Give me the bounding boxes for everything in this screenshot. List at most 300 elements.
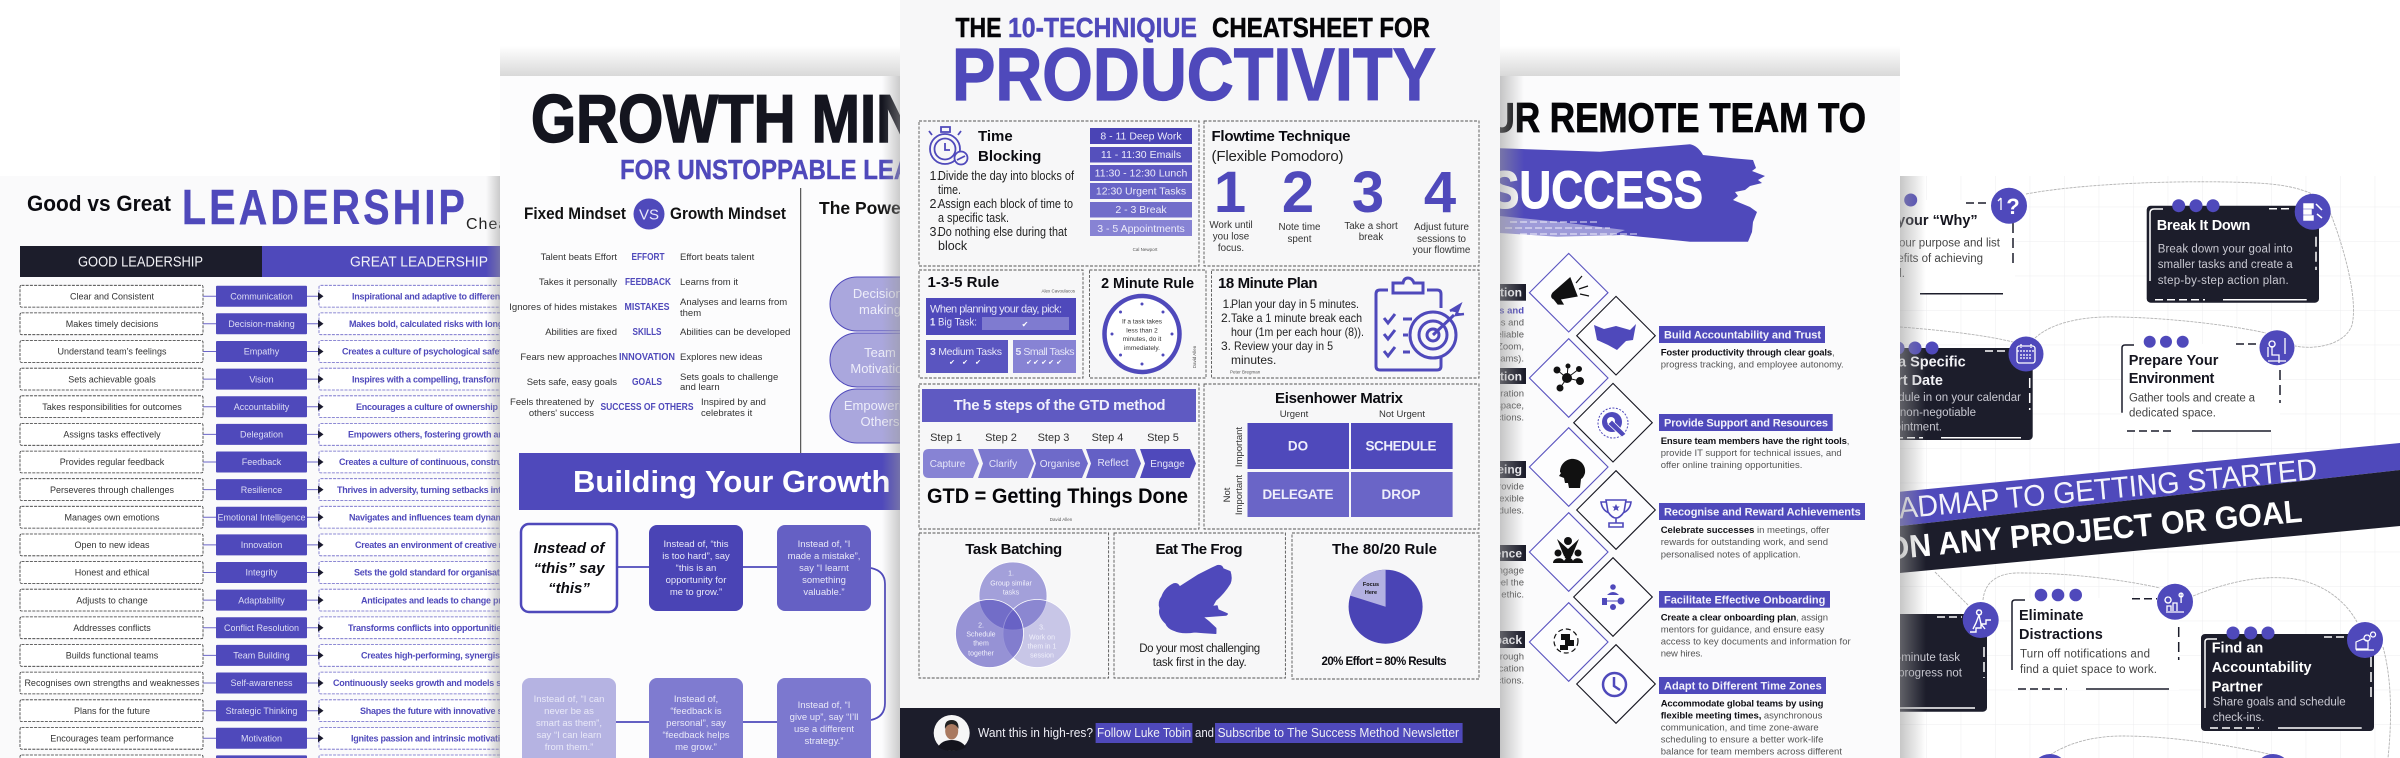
section: eisenhower matrix: Important bbox=[1234, 427, 1245, 467]
footer bar bbox=[900, 708, 1500, 758]
leadership comparison rows: Makes bold, calculated risks with long-term vision bbox=[349, 319, 551, 329]
fixed vs growth table: Analyses and learns from bbox=[680, 297, 787, 308]
section: flowtime technique: 4 bbox=[1424, 160, 1456, 225]
fixed vs growth table: SUCCESS OF OTHERS bbox=[600, 402, 694, 413]
leadership comparison rows: Sets achievable goals bbox=[68, 374, 156, 384]
card: break it down bbox=[2147, 194, 2331, 303]
icon: next roadmap step circles bbox=[2032, 754, 2291, 758]
section: time blocking: 1. bbox=[930, 169, 940, 183]
leadership comparison rows: Continuously seeks growth and models self-reflection bbox=[333, 678, 552, 688]
time block schedule: 11 - 11:30 Emails bbox=[1101, 149, 1181, 161]
leadership comparison rows: Encourages a culture of ownership and excellence bbox=[356, 402, 561, 412]
leadership comparison rows: Transforms conflicts into opportunities bbox=[348, 623, 506, 633]
left column tips: space, bbox=[1496, 400, 1524, 412]
right column tips: Ensure team members have the right tools, bbox=[1661, 436, 1849, 447]
section: flowtime technique: spent bbox=[1288, 234, 1312, 245]
section: 1-3-5 rule: When planning your day, pick: bbox=[930, 304, 1062, 316]
leadership title: LEADERSHIP bbox=[182, 181, 468, 235]
leadership comparison rows: Perseveres through challenges bbox=[50, 485, 175, 495]
time block schedule bbox=[1090, 128, 1192, 236]
section: flowtime technique: you lose bbox=[1213, 232, 1250, 242]
newsletter call to action bbox=[978, 723, 1463, 743]
fixed vs growth table: Takes it personally bbox=[539, 277, 617, 288]
section: time blocking: Cal Newport bbox=[1133, 247, 1158, 252]
leadership comparison rows: Plans for the future bbox=[74, 706, 150, 716]
banner: building your growth mindset bbox=[519, 453, 1016, 510]
section: time blocking: Blocking bbox=[978, 148, 1041, 165]
fixed vs growth table bbox=[509, 252, 790, 419]
time block schedule: 12:30 Urgent Tasks bbox=[1096, 186, 1186, 198]
venn diagram: Work on bbox=[1029, 634, 1055, 642]
gtd chevrons: Capture bbox=[930, 459, 966, 470]
section: time blocking bbox=[929, 127, 1192, 253]
section: eisenhower matrix: SCHEDULE bbox=[1366, 438, 1436, 454]
leadership column headers: GOOD LEADERSHIP bbox=[78, 254, 203, 271]
left column tips: Use tools and bbox=[1462, 306, 1524, 316]
section: 2 minute rule: 2 Minute Rule bbox=[1101, 275, 1194, 292]
right column tips: Celebrate successes in meetings, offer bbox=[1661, 525, 1829, 536]
section: eisenhower matrix: DO bbox=[1288, 438, 1308, 454]
left column tips: Teams). bbox=[1490, 354, 1524, 364]
leadership comparison rows: Feedback bbox=[242, 457, 282, 467]
card: find an accountability partner: Partner bbox=[2212, 680, 2263, 696]
leadership comparison rows: Delegation bbox=[240, 430, 283, 440]
leadership comparison rows: Creates high-performing, synergistic teams bbox=[361, 651, 537, 661]
section: 18 minute plan: 2. bbox=[1221, 311, 1231, 325]
card: set a specific start date: appointment. bbox=[1876, 422, 1942, 434]
leadership comparison rows: Creates a culture of continuous, constructive growth bbox=[339, 457, 552, 467]
right column tips: personalised notes of application. bbox=[1661, 550, 1801, 560]
leadership comparison rows: Anticipates and leads to change proactively bbox=[361, 595, 538, 605]
pills: power of growth mindset bbox=[830, 277, 950, 443]
clock illustration bbox=[1104, 296, 1180, 372]
flow: instead of this say this: me to grow.” bbox=[670, 587, 722, 598]
fixed vs growth table: Explores new ideas bbox=[680, 352, 763, 363]
productivity title: PRODUCTIVITY bbox=[952, 33, 1436, 116]
section: 18 minute plan: 1. bbox=[1222, 297, 1233, 311]
icon: frog silhouette bbox=[1159, 566, 1231, 633]
clock illustration: If a task takes bbox=[1122, 318, 1163, 326]
leadership comparison rows: Navigates and influences team dynamics bbox=[349, 512, 515, 522]
newsletter call to action: Follow Luke Tobin bbox=[1097, 726, 1191, 740]
section: 18 minute plan: 18 Minute Plan bbox=[1218, 275, 1318, 292]
card: eliminate distractions bbox=[2012, 584, 2193, 690]
leadership comparison rows: Accountability bbox=[234, 402, 290, 412]
section: 80/20 rule: 20% Effort = 80% Results bbox=[1322, 656, 1446, 668]
growth mindset subtitle: FOR UNSTOPPABLE LEADERSHIP bbox=[620, 154, 1018, 185]
flow: instead of this say this: say “I can learn bbox=[537, 730, 601, 741]
newsletter call to action: Want this in high-res? bbox=[978, 726, 1093, 740]
section: 1-3-5 rule: 1-3-5 Rule bbox=[928, 274, 999, 291]
section: 1-3-5 rule: 1 Big Task: bbox=[930, 316, 977, 328]
section: time blocking: time. bbox=[938, 183, 961, 197]
fixed vs growth heading: VS bbox=[639, 206, 659, 224]
section: eisenhower matrix: DROP bbox=[1381, 487, 1421, 502]
pills: power of growth mindset: making bbox=[859, 302, 901, 317]
card: define your why: Write down your purpose and list bbox=[1833, 238, 2001, 250]
productivity heading line: 10-TECHNIQIUE bbox=[1008, 12, 1197, 43]
section: time blocking: a specific task. bbox=[938, 211, 1009, 225]
section: 2 minute rule bbox=[1101, 275, 1197, 372]
venn diagram: Group similar bbox=[990, 580, 1032, 588]
card: set a specific start date: Set a Specific bbox=[1871, 355, 1966, 371]
right column tips: new hires. bbox=[1661, 648, 1703, 660]
leadership column headers: GREAT LEADERSHIP bbox=[350, 254, 488, 271]
card: set a specific start date: as a non-negotiable bbox=[1875, 407, 1976, 419]
left column tips: communication bbox=[1460, 664, 1524, 674]
icon: head with heart bbox=[1559, 459, 1585, 488]
banner: building your growth mindset: Building Your Growth Mindset bbox=[573, 464, 1016, 499]
venn diagram: 3. bbox=[1039, 624, 1045, 632]
leadership comparison rows: Adjusts to change bbox=[76, 595, 148, 605]
time block schedule: 11:30 - 12:30 Lunch bbox=[1095, 168, 1187, 180]
section: time blocking: Divide the day into blocks of bbox=[938, 169, 1074, 183]
flow: instead of this say this: Instead of, “I bbox=[798, 539, 850, 550]
flow: instead of this say this: opportunity for bbox=[666, 575, 726, 586]
flow: instead of this say this: is too hard”, say bbox=[662, 551, 730, 562]
venn diagram bbox=[956, 562, 1071, 668]
growth mindset title: GROWTH MINDSET bbox=[531, 81, 1073, 157]
section: flowtime technique: focus. bbox=[1218, 243, 1244, 254]
leadership comparison rows: Sets the gold standard for organisational values bbox=[354, 568, 548, 578]
flow: instead of this say this: say “I learnt bbox=[799, 563, 849, 574]
fixed vs growth table: Abilities can be developed bbox=[680, 327, 790, 338]
section: 18 minute plan: Plan your day in 5 minutes. bbox=[1231, 297, 1359, 311]
section: task batching bbox=[956, 541, 1071, 668]
fixed vs growth table: INNOVATION bbox=[619, 352, 675, 363]
banner: roadmap to getting started bbox=[1855, 443, 2400, 573]
success title line: YOUR REMOTE TEAM TO bbox=[1439, 94, 1866, 141]
card: break it down: step-by-step action plan. bbox=[2158, 275, 2289, 287]
section: eisenhower matrix: Urgent bbox=[1280, 409, 1309, 420]
right column tips: offer online training opportunities. bbox=[1661, 460, 1802, 471]
leadership comparison rows: Communication bbox=[230, 291, 293, 301]
leadership comparison rows: Recognises own strengths and weaknesses bbox=[24, 678, 200, 688]
icon: megaphone bbox=[1552, 276, 1589, 304]
leadership comparison rows: Thrives in adversity, turning setbacks into growth bbox=[337, 485, 537, 495]
section: flowtime technique: 3 bbox=[1352, 160, 1384, 225]
fixed vs growth table: celebrates it bbox=[701, 408, 753, 419]
section: eat the frog: task first in the day. bbox=[1153, 657, 1247, 669]
right column tips: balance for team members across different bbox=[1661, 746, 1842, 758]
fixed vs growth table: EFFORT bbox=[632, 252, 665, 263]
leadership column headers bbox=[20, 246, 500, 277]
leadership comparison rows: Team Building bbox=[233, 651, 290, 661]
brush stroke with success word: SUCCESS bbox=[1490, 161, 1703, 220]
card: set a specific start date: Start Date bbox=[1874, 373, 1943, 389]
flow: instead of this say this: personal”, say bbox=[666, 718, 726, 729]
card: find an accountability partner: Accountability bbox=[2212, 660, 2312, 676]
flow: instead of this say this: Instead of bbox=[534, 540, 606, 557]
pills: power of growth mindset: Motivation bbox=[850, 361, 910, 376]
fixed vs growth table: Learns from it bbox=[680, 277, 738, 288]
right column tips: Facilitate Effective Onboarding bbox=[1664, 594, 1825, 606]
left column tips: engage bbox=[1492, 566, 1524, 576]
card: find an accountability partner bbox=[2201, 622, 2383, 731]
card: define your why: the benefits of achieving bbox=[1859, 253, 1983, 265]
section: 1-3-5 rule: ✔ bbox=[1022, 320, 1028, 329]
flow: instead of this say this: Instead of, bbox=[674, 694, 718, 705]
fixed vs growth table: GOALS bbox=[632, 377, 662, 388]
icon: clipboard with target bbox=[1376, 278, 1464, 370]
section: gtd method: David Allen bbox=[1050, 517, 1073, 522]
leadership comparison rows: Adaptability bbox=[238, 595, 285, 605]
section: flowtime technique: break bbox=[1359, 232, 1383, 243]
purple diamonds bbox=[1529, 253, 1608, 681]
venn diagram: session bbox=[1030, 652, 1054, 660]
card: break it down: smaller tasks and create a bbox=[2158, 259, 2293, 271]
section: 18 minute plan: 3. bbox=[1221, 339, 1231, 353]
clock illustration: less than 2 bbox=[1126, 328, 1158, 334]
section: 1-3-5 rule: Alex Cavoulacos bbox=[1041, 288, 1076, 294]
leadership comparison rows: Assigns tasks effectively bbox=[63, 430, 161, 440]
card: take a small step: Start with a 5-minute task bbox=[1830, 652, 1960, 664]
flow: instead of this say this: me grow.” bbox=[675, 742, 717, 753]
clock illustration: immediately. bbox=[1124, 345, 1160, 352]
fixed vs growth table: Ignores of hides mistakes bbox=[509, 302, 617, 313]
section: 1-3-5 rule: ✔ bbox=[975, 360, 981, 366]
section: flowtime technique: 2 bbox=[1282, 160, 1314, 225]
right column tips: scheduling to ensure a better work-life bbox=[1661, 734, 1823, 746]
avatar bbox=[934, 715, 970, 751]
card: prepare your environment: Environment bbox=[2129, 371, 2215, 387]
section: 1-3-5 rule: ✔ bbox=[949, 360, 955, 366]
leadership comparison rows: Motivation bbox=[241, 734, 282, 744]
left column tips: feel the bbox=[1493, 578, 1524, 588]
left column tips: collaboration bbox=[1470, 388, 1524, 400]
leadership title bbox=[27, 181, 558, 235]
panel: good vs great leadership bbox=[0, 176, 561, 758]
section: gtd method: Step 2 bbox=[985, 432, 1017, 444]
gtd chevrons: Reflect bbox=[1097, 458, 1129, 469]
icon: gear and pencil bbox=[1598, 408, 1628, 438]
left column tips: interactions. bbox=[1473, 412, 1524, 424]
card: eliminate distractions: Turn off notifications and bbox=[2020, 649, 2150, 661]
leadership comparison rows: Decision-making bbox=[228, 319, 295, 329]
pills: power of growth mindset: Decision- bbox=[853, 286, 907, 301]
section: time blocking: Do nothing else during that bbox=[938, 225, 1067, 239]
left column tips: Well-being bbox=[1462, 462, 1522, 476]
gtd chevrons: Clarify bbox=[989, 459, 1017, 470]
panel: roadmap to getting started bbox=[1829, 176, 2400, 758]
fixed vs growth table: Fears new approaches bbox=[520, 352, 617, 363]
section: 1-3-5 rule: ✔ bbox=[1033, 360, 1039, 366]
leadership comparison rows: Strategic Thinking bbox=[226, 706, 297, 716]
left column tips: provide bbox=[1493, 482, 1524, 492]
leadership comparison rows: Ignites passion and intrinsic motivation bbox=[351, 734, 511, 744]
section: flowtime technique: Take a short bbox=[1344, 221, 1398, 232]
section: 1-3-5 rule: ✔ bbox=[1041, 360, 1047, 366]
pills: power of growth mindset: Empowering bbox=[844, 398, 916, 413]
leadership comparison rows: Self-awareness bbox=[230, 678, 293, 688]
leadership title: Cheatsheet bbox=[466, 216, 558, 233]
right column tips: Build Accountability and Trust bbox=[1664, 330, 1821, 342]
leadership comparison rows: Takes responsibilities for outcomes bbox=[42, 402, 182, 412]
left column tips: platforms and bbox=[1466, 318, 1524, 328]
gtd chevrons: Organise bbox=[1040, 459, 1081, 470]
fixed vs growth table: Talent beats Effort bbox=[541, 252, 617, 263]
section: 18 minute plan: Take a 1 minute break each bbox=[1231, 311, 1362, 325]
section: gtd method: Step 4 bbox=[1092, 432, 1123, 444]
section: 18 minute plan: Peter Bregman bbox=[1230, 370, 1261, 374]
flow: instead of this say this: “this is an bbox=[676, 563, 716, 574]
section: eisenhower matrix: Important bbox=[1234, 475, 1245, 515]
flow: instead of this say this: “feedback is bbox=[670, 706, 722, 717]
card: define your why bbox=[1833, 188, 2027, 294]
card: prepare your environment: Gather tools and create a bbox=[2129, 393, 2256, 405]
left column tips: through bbox=[1492, 652, 1524, 662]
left column tips: Feedback bbox=[1467, 633, 1522, 647]
right column tips: rewards for outstanding work, and send bbox=[1661, 537, 1828, 548]
icon: onboarding flow bbox=[1602, 584, 1624, 610]
right column tips: provide IT support for technical issues, and bbox=[1661, 448, 1842, 459]
newsletter call to action: and bbox=[1195, 726, 1214, 740]
gtd chevrons: Engage bbox=[1150, 459, 1185, 470]
pie chart: Focus bbox=[1363, 582, 1379, 588]
card: eliminate distractions: Distractions bbox=[2019, 627, 2103, 643]
fixed vs growth table: Effort beats talent bbox=[680, 252, 755, 263]
dashed section frames bbox=[919, 121, 1479, 679]
flow: instead of this say this: made a mistake”, bbox=[788, 551, 860, 562]
leadership comparison rows: Resilience bbox=[241, 485, 282, 495]
fixed vs growth table: SKILLS bbox=[632, 327, 662, 338]
time block schedule: 8 - 11 Deep Work bbox=[1100, 130, 1182, 142]
flow: instead of this say this bbox=[521, 524, 885, 758]
flow: instead of this say this: valuable.” bbox=[803, 587, 845, 598]
section: gtd method: GTD = Getting Things Done bbox=[927, 485, 1188, 508]
fixed vs growth table: Feels threatened by bbox=[510, 397, 594, 408]
flow: instead of this say this: Instead of, “I bbox=[798, 700, 850, 711]
section: 2 minute rule: David Allen bbox=[1192, 345, 1197, 368]
section: time blocking: Time bbox=[978, 128, 1013, 145]
leadership comparison rows bbox=[20, 285, 561, 758]
section: 18 minute plan: Review your day in 5 bbox=[1234, 339, 1333, 353]
section: flowtime technique: (Flexible Pomodoro) bbox=[1212, 148, 1344, 165]
productivity heading line bbox=[956, 12, 1430, 43]
section: time blocking: 3. bbox=[930, 225, 940, 239]
pie chart: Here bbox=[1365, 590, 1377, 596]
fixed vs growth table: Sets goals to challenge bbox=[680, 372, 778, 383]
card: eliminate distractions: Eliminate bbox=[2019, 608, 2083, 624]
right column tips: Accommodate global teams by using bbox=[1661, 698, 1824, 710]
flow: instead of this say this: Instead of, “this bbox=[664, 539, 729, 550]
right column tips bbox=[1659, 326, 1865, 758]
card: prepare your environment bbox=[2122, 330, 2294, 432]
card: find an accountability partner: Share goals and schedule bbox=[2213, 697, 2346, 709]
flow: instead of this say this: “this” say bbox=[534, 560, 605, 577]
leadership comparison rows: Honest and ethical bbox=[75, 568, 149, 578]
venn diagram: together bbox=[968, 650, 995, 658]
fixed vs growth table: MISTAKES bbox=[624, 302, 670, 313]
left column tips: Resilience bbox=[1463, 546, 1522, 560]
flow: instead of this say this: use a different bbox=[794, 724, 854, 735]
right column tips: flexible meeting times, asynchronous bbox=[1661, 710, 1823, 722]
clock illustration: minutes, do it bbox=[1123, 336, 1162, 343]
left column tips: Communication bbox=[1431, 286, 1522, 300]
left column tips: schedules. bbox=[1479, 506, 1524, 516]
card: set a specific start date: Schedule in on your calendar bbox=[1872, 392, 2021, 404]
fixed vs growth table: Sets safe, easy goals bbox=[527, 377, 617, 388]
gtd chevrons bbox=[923, 449, 1196, 478]
flow: instead of this say this: “feedback helps bbox=[662, 730, 730, 741]
section: 1-3-5 rule: 5 Small Tasks bbox=[1016, 346, 1074, 358]
section: 18 minute plan: minutes. bbox=[1231, 353, 1276, 367]
card: prepare your environment: dedicated space. bbox=[2129, 408, 2216, 420]
section: time blocking: 2. bbox=[930, 197, 940, 211]
right column tips: access to key documents and information for bbox=[1661, 636, 1851, 648]
leadership comparison rows: Builds functional teams bbox=[66, 651, 159, 661]
section: flowtime technique: Note time bbox=[1279, 222, 1321, 233]
leadership comparison rows: Vision bbox=[249, 374, 274, 384]
leadership comparison rows: Addresses conflicts bbox=[73, 623, 151, 633]
right column tips: Foster productivity through clear goals, bbox=[1661, 348, 1835, 358]
section: time blocking: block bbox=[938, 239, 968, 253]
section: eisenhower matrix: DELEGATE bbox=[1262, 487, 1334, 502]
card: prepare your environment: Prepare Your bbox=[2129, 353, 2219, 369]
leadership comparison rows: Innovation bbox=[241, 540, 282, 550]
card: take a small step bbox=[1829, 602, 1999, 712]
card: find an accountability partner: check-ins. bbox=[2213, 712, 2264, 724]
flow: instead of this say this: “this” bbox=[548, 580, 590, 597]
right column tips: Create a clear onboarding plan, assign bbox=[1661, 612, 1828, 624]
icon: feedback speech bubbles bbox=[1554, 629, 1578, 653]
section: 1-3-5 rule: 3 Medium Tasks bbox=[930, 346, 1002, 358]
flow: instead of this say this: give up”, say “I’ll bbox=[790, 712, 858, 723]
section: 1-3-5 rule bbox=[926, 274, 1076, 373]
section: 1-3-5 rule: ✔ bbox=[1026, 360, 1032, 366]
section: gtd method: Step 3 bbox=[1038, 432, 1069, 444]
panel: remote team success bbox=[1431, 76, 1900, 758]
power of growth mindset heading: The Power of a Growth Mindset bbox=[819, 198, 1081, 218]
leadership comparison rows: Inspirational and adaptive to different audiences bbox=[352, 291, 547, 301]
card: define your why: ? bbox=[2006, 194, 2020, 219]
flow: instead of this say this: something bbox=[802, 575, 846, 586]
leadership comparison rows: Shapes the future with innovative strategies bbox=[360, 706, 538, 716]
card: break it down: Break It Down bbox=[2157, 218, 2250, 234]
section: 80/20 rule: The 80/20 Rule bbox=[1332, 541, 1437, 558]
icon: stopwatch bbox=[929, 127, 968, 164]
panel: growth mindset bbox=[500, 76, 1081, 758]
leadership comparison rows: Inspires with a compelling, transformative vision bbox=[352, 374, 548, 384]
icon: group celebrating bbox=[1553, 537, 1583, 563]
roadmap connector paths bbox=[1900, 182, 2391, 758]
section: gtd method: The 5 steps of the GTD method bbox=[954, 397, 1166, 414]
right column tips: Adapt to Different Time Zones bbox=[1664, 680, 1822, 692]
productivity heading line: CHEATSHEET FOR bbox=[1212, 12, 1430, 43]
section: flowtime technique: sessions to bbox=[1417, 234, 1467, 245]
leadership comparison rows: Understand team’s feelings bbox=[58, 347, 167, 357]
icon: network of people bbox=[1554, 364, 1584, 391]
card: find an accountability partner: Find an bbox=[2212, 641, 2263, 657]
banner: roadmap to getting started: ON ANY PROJECT OR GOAL bbox=[1884, 493, 2304, 567]
card: set a specific start date bbox=[1860, 336, 2044, 440]
pills: power of growth mindset: Others bbox=[860, 414, 900, 429]
icon: trophy bbox=[1601, 500, 1631, 527]
section: 1-3-5 rule: ✔ bbox=[1048, 360, 1054, 366]
card: define your why: your goal. bbox=[1854, 268, 1905, 280]
leadership title: Good vs Great bbox=[27, 191, 171, 216]
right column tips: Provide Support and Resources bbox=[1664, 418, 1828, 430]
pie chart bbox=[1349, 570, 1423, 644]
right column tips: Recognise and Reward Achievements bbox=[1664, 506, 1861, 518]
section: 1-3-5 rule: ✔ bbox=[962, 360, 968, 366]
brush stroke with success word bbox=[1490, 144, 1765, 242]
section: flowtime technique: Flowtime Technique bbox=[1212, 128, 1350, 145]
section: task batching: Task Batching bbox=[965, 541, 1062, 558]
left column tips: Zoom, bbox=[1497, 342, 1524, 352]
productivity heading line: THE bbox=[956, 12, 1002, 43]
fixed vs growth heading: Growth Mindset bbox=[670, 204, 786, 223]
